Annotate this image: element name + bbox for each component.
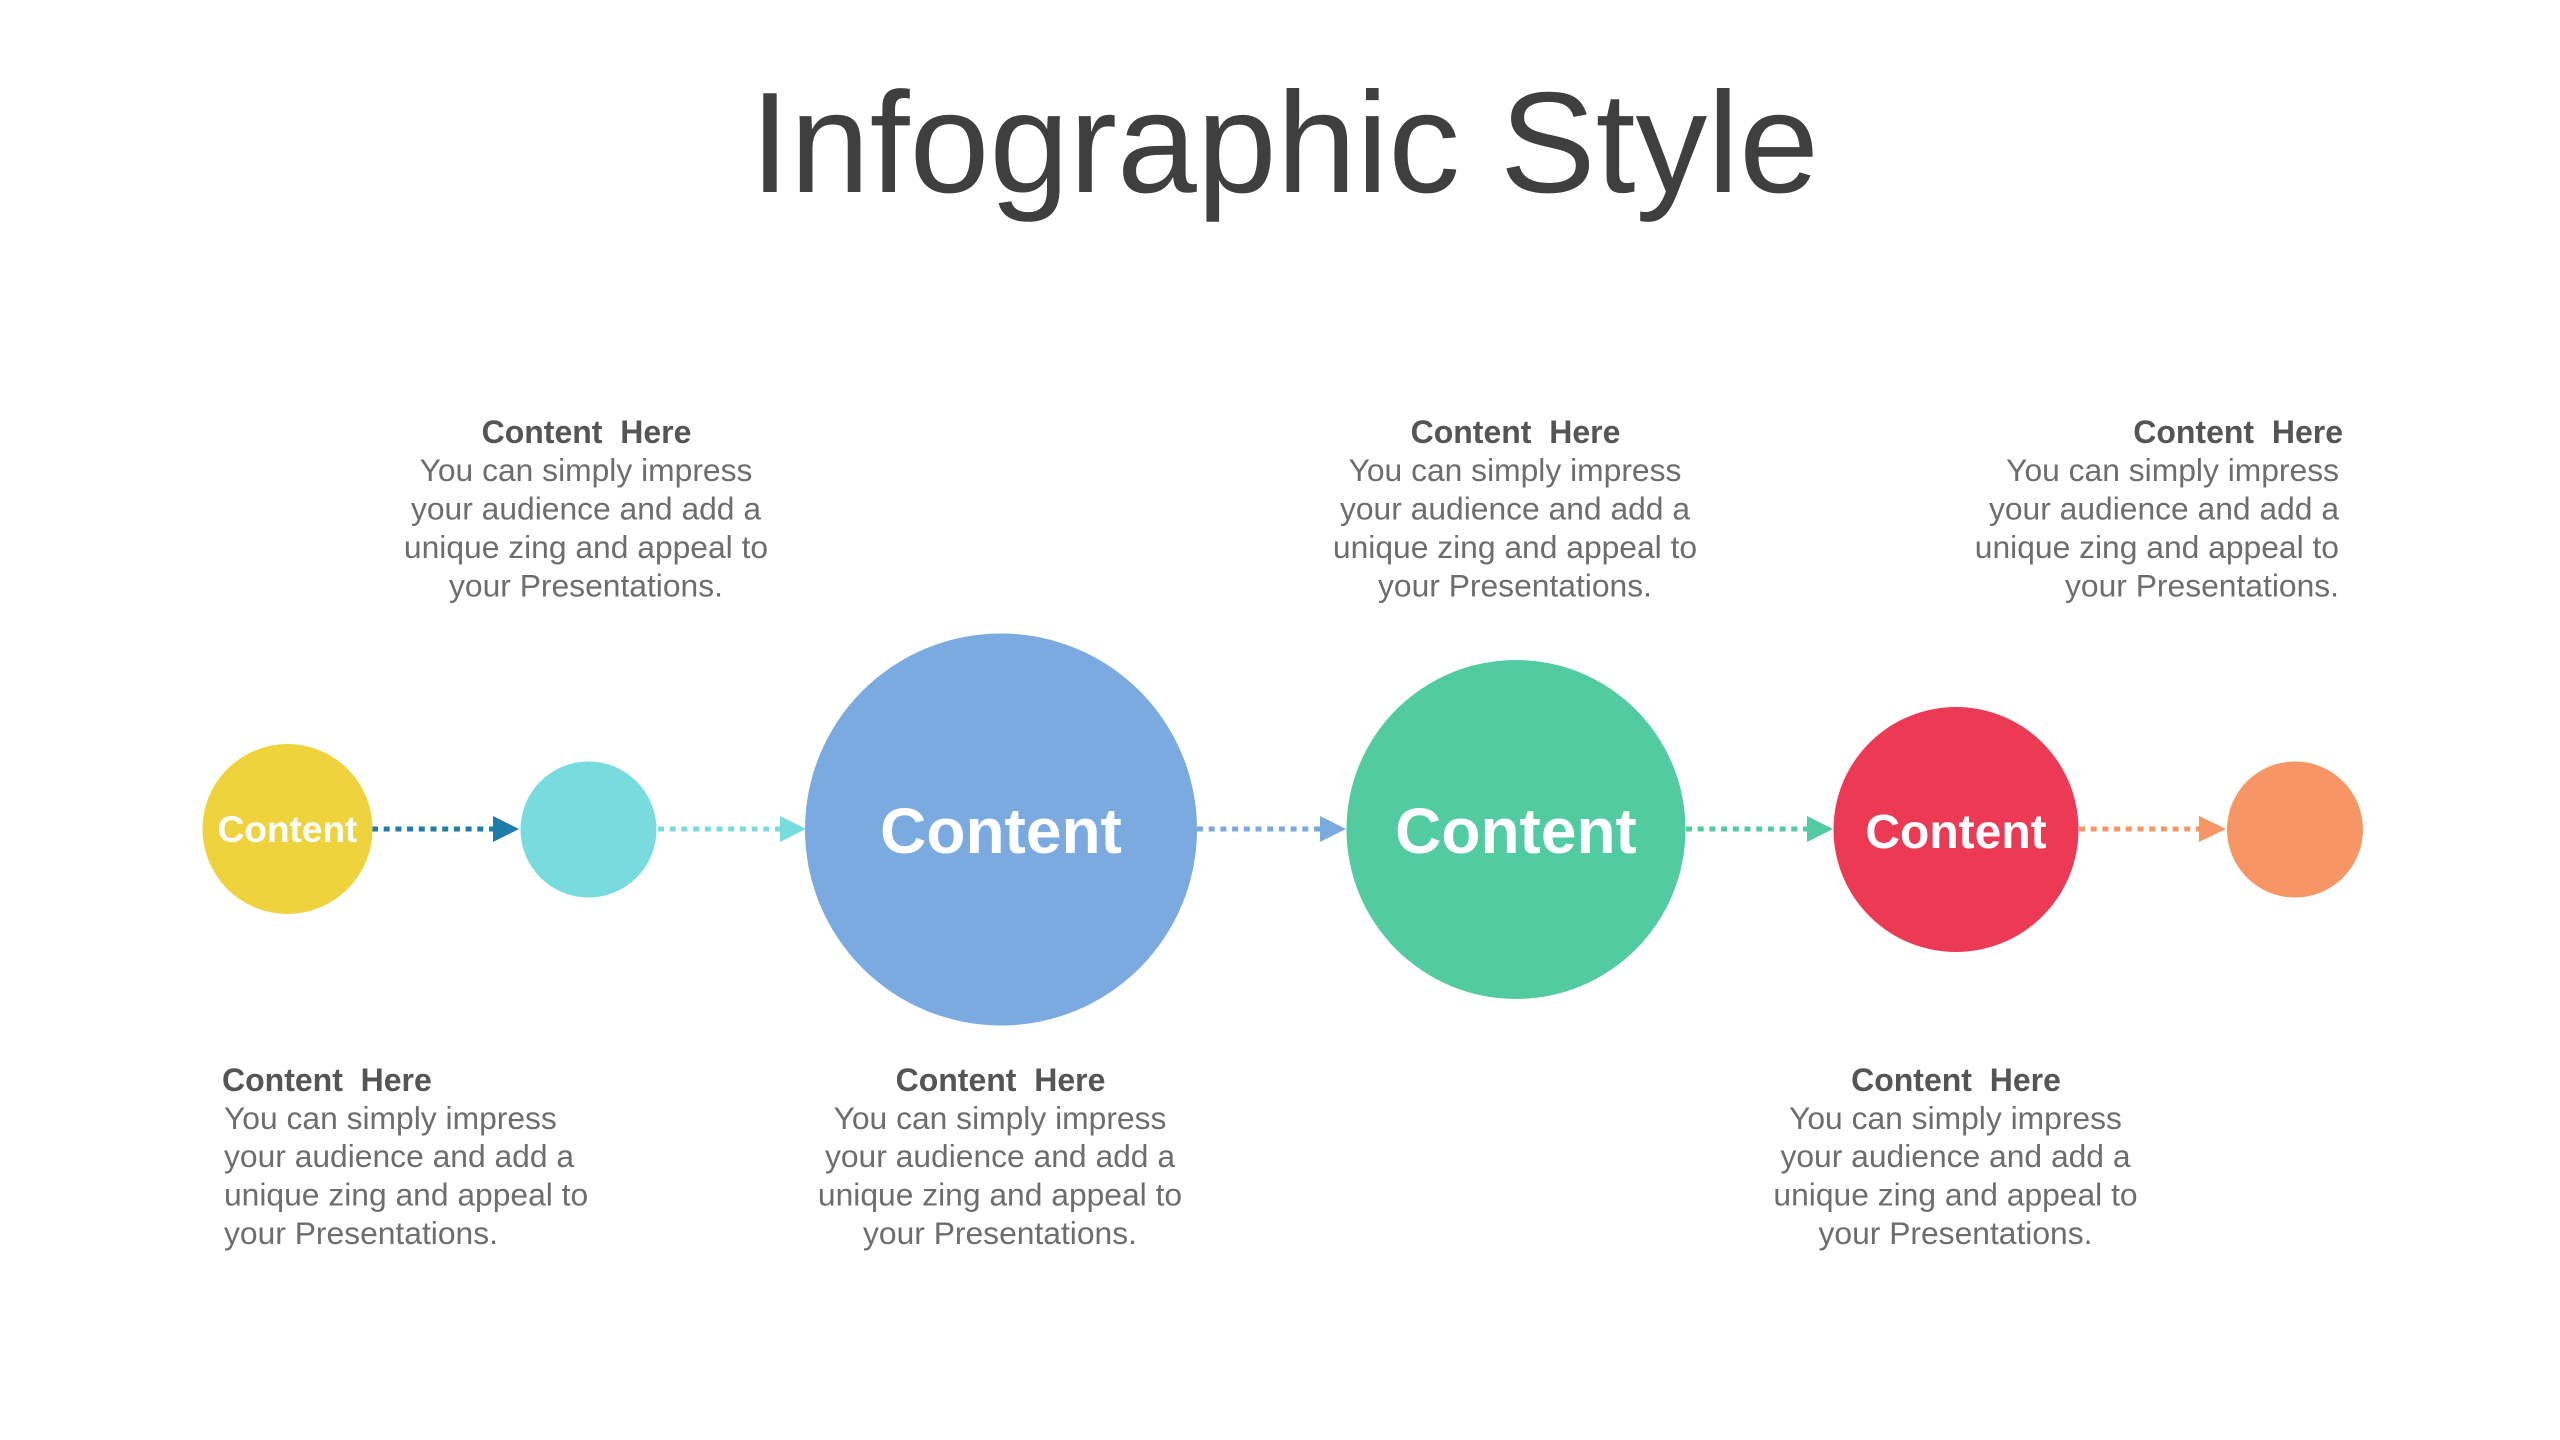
text block: bottom 3: You can simply impress (1789, 1100, 2122, 1136)
text block: bottom 3: unique zing and appeal to (1773, 1176, 2138, 1212)
circle: red: Content (1865, 806, 2047, 859)
circle: red (1834, 707, 2078, 952)
text block: top 1: your Presentations. (449, 568, 723, 604)
text block: top 2: Content Here (1411, 414, 1620, 450)
text block: bottom 3: your audience and add a (1780, 1138, 2131, 1174)
arrow: teal to blue (658, 816, 806, 842)
text block: top 2: your audience and add a (1340, 490, 1690, 526)
circle: blue (805, 634, 1197, 1026)
text block: top 3: your Presentations. (2065, 568, 2339, 604)
text block: bottom 3 (1773, 1062, 2138, 1251)
text block: top 2: your Presentations. (1378, 568, 1652, 604)
circle: teal (520, 762, 656, 898)
text block: bottom 1: your Presentations. (224, 1215, 498, 1251)
circle: orange (2227, 762, 2363, 898)
circle: blue: Content (880, 795, 1122, 867)
text block: bottom 2: your audience and add a (825, 1138, 1175, 1174)
text block: bottom 3: your Presentations. (1819, 1215, 2092, 1251)
text block: bottom 2: unique zing and appeal to (818, 1176, 1182, 1212)
circle: green (1346, 660, 1686, 999)
text block: bottom 2: You can simply impress (834, 1100, 1166, 1136)
arrow: green to red (1686, 816, 1833, 842)
circle: green: Content (1395, 795, 1637, 867)
circle: yellow (202, 744, 372, 914)
arrow: red to orange (2079, 816, 2226, 842)
text block: top 1 (404, 414, 768, 604)
title: Infographic Style (750, 63, 1819, 223)
text block: bottom 2 (818, 1062, 1182, 1251)
text block: top 1: Content Here (482, 414, 691, 450)
text block: top 3: Content Here (2133, 414, 2343, 450)
arrow: blue to green (1197, 816, 1346, 842)
text block: bottom 2: your Presentations. (863, 1215, 1137, 1251)
text block: top 2 (1333, 414, 1697, 604)
text block: bottom 1: unique zing and appeal to (224, 1176, 588, 1212)
text block: top 3 (1975, 414, 2343, 604)
text block: bottom 1: Content Here (222, 1062, 432, 1098)
text block: top 2: unique zing and appeal to (1333, 529, 1697, 565)
text block: bottom 1: your audience and add a (224, 1138, 574, 1174)
text block: top 1: You can simply impress (420, 452, 752, 488)
text block: bottom 3: Content Here (1851, 1062, 2061, 1098)
text block: top 3: You can simply impress (2006, 452, 2339, 488)
text block: top 2: You can simply impress (1349, 452, 1681, 488)
text block: top 3: unique zing and appeal to (1975, 529, 2339, 565)
circle: yellow: Content (218, 809, 357, 850)
text block: top 1: unique zing and appeal to (404, 529, 768, 565)
text block: top 3: your audience and add a (1989, 490, 2339, 526)
arrow: yellow to teal (372, 816, 519, 842)
text block: bottom 1: You can simply impress (224, 1100, 557, 1136)
text block: top 1: your audience and add a (411, 490, 761, 526)
text block: bottom 1 (222, 1062, 588, 1251)
text block: bottom 2: Content Here (896, 1062, 1105, 1098)
